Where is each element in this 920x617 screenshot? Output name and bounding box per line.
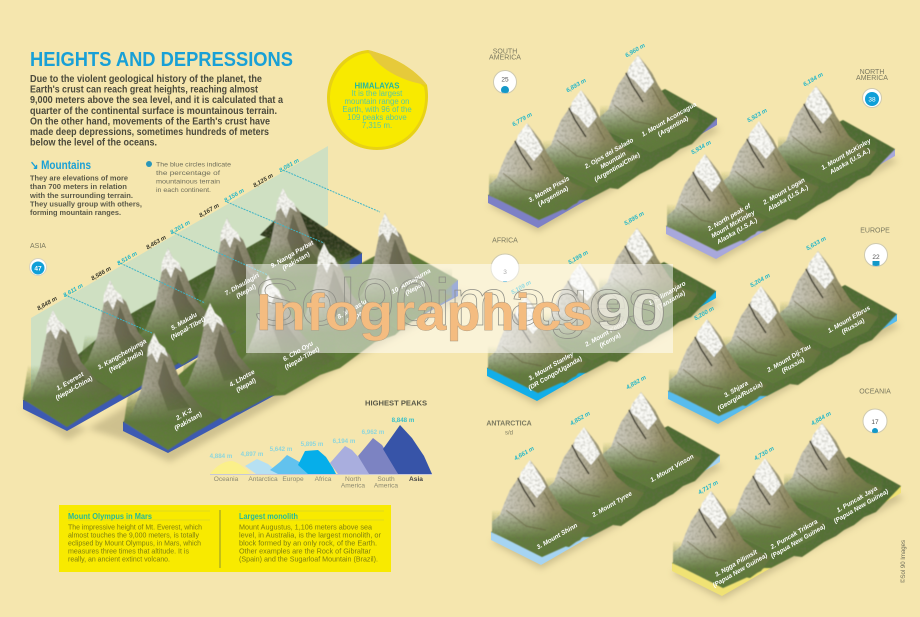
labels: Africa peaks: 1. Kilimanjaro bbox=[647, 280, 687, 307]
asia height labels: 8,125 m bbox=[252, 173, 275, 189]
callout sticker: Himalayas: 7,315 m. bbox=[362, 121, 392, 130]
labels: Africa peaks: (DR Congo/Uganda) bbox=[527, 355, 583, 392]
label: Africa circle: AFRICA bbox=[492, 238, 518, 244]
asia front row base bbox=[123, 280, 458, 453]
asia front row mountains bbox=[123, 213, 458, 450]
labels: Antarctica peaks: 3. Mount Shinn bbox=[536, 522, 579, 551]
callout sticker: Himalayas: HIMALAYAS bbox=[355, 82, 399, 90]
asia peak names: 7. Dhaulagiri bbox=[224, 272, 261, 297]
label: Africa circle: 3 bbox=[503, 269, 507, 276]
fact: Mount Olympus: measures three times that altitude. It is bbox=[68, 546, 189, 556]
asia peak names: 8. Manaslu bbox=[336, 298, 368, 321]
legend note: blue circles: The blue circles indicate bbox=[156, 162, 231, 168]
labels: Europe peaks: (Georgia/Russia) bbox=[716, 381, 764, 412]
asia peak names: 5. Makalu bbox=[170, 311, 198, 332]
callout sticker: Himalayas: mountain range on bbox=[344, 97, 410, 106]
intro text: 9,000 meters above the sea level, and it is calculated that a bbox=[30, 95, 284, 106]
panel: South America: 6,960 m bbox=[624, 43, 647, 59]
label: North America circle: 38 bbox=[868, 96, 876, 104]
labels: North America peaks: 2. Mount Logan bbox=[762, 177, 806, 207]
labels: Oceania peaks: 2. Puncak Trikora bbox=[769, 518, 819, 551]
labels: Oceania peaks: 4,884 m bbox=[810, 411, 833, 428]
intro text: quarter of the continental surface is mountainous terrain. bbox=[30, 106, 277, 117]
fact: Mount Olympus: The impressive height of Mt. Everest, which bbox=[68, 522, 202, 532]
panel: South America bbox=[488, 43, 720, 232]
mountains definition: They are elevations of more bbox=[30, 174, 128, 182]
labels: Europe peaks: 5,633 m bbox=[805, 236, 828, 252]
chart: highest peaks: Africa bbox=[315, 476, 332, 483]
labels: Africa peaks: 5,109 m bbox=[510, 280, 533, 296]
asia peak names: 1. Everest bbox=[55, 371, 85, 392]
label: North America circle: NORTH bbox=[860, 69, 884, 76]
panel: South America: 6,779 m bbox=[511, 112, 534, 128]
intro text: below the level of the oceans. bbox=[30, 138, 157, 149]
labels: Oceania peaks: (Papua New Guinea) bbox=[833, 488, 890, 525]
chart: highest peaks: 4,897 m bbox=[241, 451, 264, 458]
fact: Largest monolith: block formed by an only rock, of the Earth. bbox=[239, 538, 377, 548]
fact: Largest monolith: level, in Australia, is the largest monolith, or bbox=[239, 530, 382, 540]
asia height labels: 8,848 m bbox=[36, 296, 59, 312]
fact: Mount Olympus: eclipsed by Mount Olympus, in Mars, which bbox=[68, 538, 201, 548]
labels: Africa peaks: 3. Mount Stanley bbox=[528, 351, 575, 382]
asia peak names: 4. Lhotse bbox=[228, 369, 256, 389]
intro text bbox=[30, 74, 284, 149]
panel: South America: 1. Mount Aconcagua bbox=[641, 101, 698, 138]
mountains definition bbox=[29, 158, 142, 217]
chart: highest peaks: 5,895 m bbox=[301, 441, 324, 448]
asia peak names: 6. Cho Oyu bbox=[282, 340, 315, 363]
fact: Mount Olympus: almost touches the 9,000 meters, is totally bbox=[68, 530, 199, 540]
callout sticker: Himalayas: 109 peaks above bbox=[347, 113, 407, 122]
labels: North America peaks: 6,194 m bbox=[802, 72, 825, 88]
chart: highest peaks: America bbox=[374, 482, 398, 490]
label: Antarctica: ANTARCTICA bbox=[486, 420, 532, 428]
labels: Africa peaks: 2. Mount Kenya bbox=[584, 319, 628, 349]
asia height labels: 8,516 m bbox=[116, 251, 139, 267]
labels: Europe peaks: 3. Shjara bbox=[723, 380, 750, 399]
asia peak names: (Pakistan) bbox=[281, 251, 311, 272]
label: South America circle bbox=[489, 48, 521, 94]
labels: Europe peaks: 5,204 m bbox=[749, 273, 772, 289]
label: Europe circle: 22 bbox=[872, 254, 880, 261]
panel: North America bbox=[666, 86, 898, 263]
asia height labels: 8,167 m bbox=[198, 203, 221, 219]
label: Africa circle bbox=[491, 238, 519, 282]
chart: highest peaks: America bbox=[341, 482, 365, 490]
fact: Largest monolith: Mount Augustus, 1,106 meters above sea bbox=[239, 522, 373, 532]
asia label and circle: ASIA bbox=[30, 243, 46, 250]
callout sticker: Himalayas bbox=[327, 50, 428, 150]
label: South America circle: 25 bbox=[501, 76, 509, 84]
chart: highest peaks: Asia bbox=[409, 476, 423, 483]
watermark: Infographics bbox=[256, 284, 593, 342]
chart: highest peaks: 6,194 m bbox=[333, 438, 356, 445]
label: North America circle bbox=[856, 69, 888, 108]
legend note: blue circles: the percentage of bbox=[156, 170, 220, 177]
asia peak names bbox=[51, 239, 437, 432]
panel: Europe bbox=[668, 251, 900, 428]
labels: Oceania peaks: (Papua New Guinea) bbox=[770, 523, 827, 560]
asia peak names: (Nepal) bbox=[404, 280, 426, 297]
mountains definition: They usually group with others, bbox=[30, 200, 142, 208]
panel: Antarctica bbox=[491, 392, 723, 569]
chart: highest peaks: HIGHEST PEAKS bbox=[365, 398, 427, 408]
label: South America circle: SOUTH bbox=[493, 48, 517, 56]
labels: Oceania peaks bbox=[697, 411, 890, 589]
labels: Antarctica peaks: 2. Mount Tyree bbox=[590, 490, 634, 519]
chart: highest peaks bbox=[210, 398, 432, 490]
labels: Oceania peaks: 3. Ngga Pilimsit bbox=[714, 549, 759, 579]
mountains definition: than 700 meters in relation bbox=[30, 182, 127, 191]
labels: Europe peaks: (Russia) bbox=[841, 317, 866, 336]
mountains definition: ↘ Mountains bbox=[30, 158, 91, 172]
labels: Antarctica peaks: 4,892 m bbox=[625, 375, 648, 392]
intro text: made deep depressions, sometimes hundreds of meters bbox=[30, 127, 270, 138]
asia height labels: 8,586 m bbox=[90, 266, 113, 282]
chart: highest peaks: South bbox=[377, 476, 395, 483]
panel: South America: Mountain bbox=[599, 150, 627, 171]
label: Oceania circle: OCEANIA bbox=[859, 388, 891, 396]
intro text: Earth's crust can reach great heights, reaching almost bbox=[30, 85, 259, 96]
chart: highest peaks: 4,884 m bbox=[210, 453, 233, 460]
chart: highest peaks: 5,642 m bbox=[270, 446, 293, 453]
labels: North America peaks: 5,923 m bbox=[746, 108, 769, 124]
labels: Antarctica peaks bbox=[513, 375, 695, 551]
watermark: 90 bbox=[596, 284, 666, 342]
panel: South America: 2. Ojos del Salado bbox=[584, 137, 635, 170]
callout sticker: Himalayas: It is the largest bbox=[352, 89, 403, 98]
asia label and circle bbox=[30, 243, 46, 276]
label: North America circle: AMERICA bbox=[856, 75, 888, 82]
asia back row base bbox=[23, 253, 362, 431]
labels: Europe peaks: (Russia) bbox=[781, 356, 806, 375]
asia peak names: (Nepal-India) bbox=[108, 349, 145, 374]
labels: North America peaks: Alaska (U.S.A.) bbox=[715, 217, 759, 246]
height dotted lines bbox=[65, 170, 380, 333]
asia peak names: 3. Kangchenjunga bbox=[97, 338, 148, 371]
labels: Oceania peaks: 4,717 m bbox=[697, 480, 720, 497]
fact: Mount Olympus bbox=[68, 512, 202, 564]
fact: Mount Olympus: Mount Olympus in Mars bbox=[68, 512, 153, 521]
labels: Europe peaks bbox=[693, 236, 876, 412]
label: South America circle: AMERICA bbox=[489, 54, 521, 62]
labels: Europe peaks: 1. Mount Elbrus bbox=[827, 305, 872, 335]
panel: Africa bbox=[487, 228, 719, 405]
panel: yellow fact box bbox=[59, 505, 391, 572]
asia peak names: (Pakistan) bbox=[173, 411, 203, 432]
asia peak names: 2. K-2 bbox=[175, 407, 194, 422]
legend note: blue circles: in each continent. bbox=[156, 187, 211, 194]
chart: highest peaks: 8,848 m bbox=[392, 417, 415, 424]
label: Oceania circle: 17 bbox=[871, 419, 879, 426]
panel: South America: 6,893 m bbox=[565, 78, 588, 94]
labels: Europe peaks: 5,200 m bbox=[693, 306, 716, 322]
intro text: On the other hand, movements of the Earth's crust have bbox=[30, 116, 270, 127]
asia height labels: 8,091 m bbox=[278, 158, 301, 174]
panel: Oceania bbox=[672, 423, 904, 600]
labels: Antarctica peaks: 1. Mount Vinson bbox=[649, 453, 695, 484]
labels: Africa peaks: (Tanzania) bbox=[656, 290, 687, 312]
asia peak names: (Nepal-China) bbox=[55, 375, 94, 402]
labels: North America peaks: 5,934 m bbox=[690, 140, 713, 156]
label: Antarctica: s/d bbox=[505, 430, 513, 436]
watermark: Sol90images bbox=[253, 265, 663, 339]
panel: South America: 3. Monte Pissis bbox=[528, 175, 571, 204]
panel: South America: (Argentina) bbox=[537, 185, 570, 208]
asia back row mountains bbox=[23, 188, 362, 427]
labels: North America peaks: Alaska (U.S.A.) bbox=[828, 147, 872, 177]
labels: North America peaks: 2. North peak of bbox=[707, 203, 752, 233]
panel: height reference plane bbox=[31, 146, 328, 400]
chart: highest peaks: Antarctica bbox=[248, 476, 278, 483]
labels: North America peaks: Alaska (U.S.A.) bbox=[766, 184, 810, 214]
labels: Africa peaks: 5,199 m bbox=[567, 250, 590, 266]
asia height labels: 8,156 m bbox=[223, 188, 246, 204]
panel: South America: (Argentina) bbox=[657, 115, 690, 138]
mountains definition: with the surrounding terrain. bbox=[29, 191, 133, 200]
labels: Africa peaks bbox=[510, 211, 691, 392]
chart: highest peaks: North bbox=[345, 476, 361, 483]
intro text: Due to the violent geological history of the planet, the bbox=[30, 74, 263, 85]
chart: highest peaks: 6,962 m bbox=[362, 429, 385, 436]
asia height labels: 8,463 m bbox=[145, 235, 168, 251]
labels: Antarctica peaks: 4,852 m bbox=[569, 411, 592, 428]
label: Europe circle bbox=[860, 228, 890, 268]
fact: Largest monolith: Largest monolith bbox=[239, 512, 298, 521]
asia peak names: (Nepal) bbox=[235, 377, 257, 394]
labels: Oceania peaks: (Papua New Guinea) bbox=[712, 552, 769, 589]
chart: highest peaks: Europe bbox=[282, 476, 304, 483]
asia label and circle: 47 bbox=[34, 266, 42, 272]
asia peak names: (Nepal) bbox=[345, 308, 367, 325]
labels: Oceania peaks: 1. Puncak Jaya bbox=[836, 485, 879, 514]
fact: Mount Olympus: really, an ancient extinct volcano. bbox=[68, 554, 170, 564]
labels: Oceania peaks: 4,730 m bbox=[753, 446, 776, 463]
label: Europe circle: EUROPE bbox=[860, 228, 890, 234]
credit: ©Sol 90 Images bbox=[900, 540, 907, 583]
labels: Europe peaks: 2. Mount Dij-Tau bbox=[766, 343, 812, 374]
labels: North America peaks: Mount McKinley bbox=[710, 209, 757, 240]
labels: North America peaks bbox=[690, 72, 877, 247]
legend note: blue circles bbox=[146, 161, 231, 194]
panel: Asia mountain ranges bbox=[20, 158, 470, 462]
labels: Africa peaks: 5,895 m bbox=[623, 211, 646, 227]
legend note: blue circles: mountainous terrain bbox=[156, 178, 220, 186]
labels: Antarctica peaks: 4,661 m bbox=[513, 446, 536, 463]
labels: North America peaks: 1. Mount McKinley bbox=[820, 138, 872, 172]
label: Antarctica bbox=[486, 420, 532, 436]
asia peak names: (Nepal-Tibet) bbox=[170, 316, 207, 341]
asia height labels: 8,201 m bbox=[169, 220, 192, 236]
asia peak names: (Nepal-Tibet) bbox=[284, 346, 321, 371]
asia peak names: 9. Nanga Parbat bbox=[270, 240, 315, 270]
callout sticker: Himalayas: Earth, with 96 of the bbox=[342, 105, 412, 114]
fact: Largest monolith: Other examples are the Rock of Gibraltar bbox=[239, 546, 372, 556]
label: Oceania circle bbox=[859, 388, 891, 434]
mountains definition: forming mountain ranges. bbox=[30, 208, 121, 217]
asia block shadows bbox=[20, 265, 470, 462]
panel: South America: (Argentina/Chile) bbox=[593, 152, 641, 183]
asia peak names: 10. Annapurna bbox=[390, 268, 432, 296]
fact: Largest monolith bbox=[239, 512, 382, 564]
labels: Africa peaks: (Kenya) bbox=[598, 332, 622, 350]
asia peak names: (Nepal) bbox=[235, 283, 257, 300]
chart: highest peaks: Oceania bbox=[214, 476, 239, 483]
title: HEIGHTS AND DEPRESSIONS bbox=[30, 48, 293, 71]
asia height labels: 8,611 m bbox=[63, 283, 85, 299]
fact: Largest monolith: (Spain) and the Sugarloaf Mountain (Brazil). bbox=[239, 554, 378, 564]
asia height labels bbox=[36, 158, 301, 312]
